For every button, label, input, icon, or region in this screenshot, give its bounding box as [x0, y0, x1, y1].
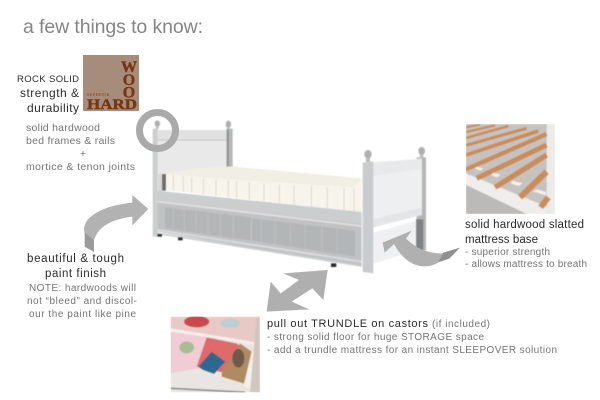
photo: trundle drawer [171, 316, 260, 392]
text: paint finish note: our the paint like pine [29, 309, 136, 320]
icon: hardwood stamp [83, 55, 139, 113]
text: paint finish note [27, 283, 137, 320]
icon: hardwood stamp: W [121, 59, 137, 76]
heading: trundle: (if included) [432, 319, 490, 330]
trundle drawer [157, 202, 362, 267]
icon: hardwood stamp: O [123, 84, 135, 102]
heading: paint finish [27, 253, 124, 280]
heading: rock solid: ROCK SOLID [17, 74, 79, 85]
footboard front post [363, 150, 373, 273]
text: hardwood description [26, 122, 135, 173]
heading: paint finish: beautiful & tough [27, 253, 124, 265]
text: paint finish note: NOTE: hardwoods will [29, 283, 136, 294]
icon: hardwood stamp: HARD [87, 97, 137, 113]
panel: paint finish text [27, 253, 137, 320]
text: slatted base bullets [465, 247, 587, 270]
mattress [166, 167, 362, 212]
heading: slatted base [465, 219, 584, 246]
text: paint finish note: not “bleed” and discol- [27, 296, 137, 307]
icon: hardwood stamp: O [123, 72, 135, 89]
far footboard post [416, 147, 426, 251]
callout ring [140, 112, 176, 148]
trundle end [373, 221, 416, 264]
text: slatted base bullets: - allows mattress to breath [465, 259, 587, 270]
heading: rock solid: durability [27, 101, 79, 115]
arrow: curved to slatted base [383, 231, 460, 266]
text: hardwood description: mortice & tenon joints [26, 161, 135, 173]
headboard [153, 120, 233, 237]
title: a few things to know: [23, 16, 203, 38]
side rail [157, 191, 362, 226]
heading: trundle: pull out TRUNDLE on castors [267, 318, 428, 330]
heading: slatted base: mattress base [465, 234, 538, 246]
icon: hardwood stamp: SUPERIOR [87, 93, 110, 97]
arrow: curved to paint finish [84, 195, 148, 252]
heading: rock solid: strength & [20, 86, 79, 100]
castors [157, 234, 336, 267]
arrow: double-headed trundle [267, 270, 328, 312]
text: trundle bullets [267, 332, 557, 356]
panel: trundle [171, 316, 557, 392]
panel: rock solid strength [17, 55, 139, 173]
text: slatted base bullets: - superior strength [465, 247, 550, 258]
text: trundle bullets: - add a trundle mattress for an instant SLEEPOVER solution [267, 345, 557, 356]
text: hardwood description: bed frames & rails [26, 135, 115, 147]
photo: slats [466, 124, 555, 214]
heading: paint finish: paint finish [45, 268, 106, 280]
panel: slatted base [465, 124, 587, 270]
heading: rock solid [17, 74, 79, 115]
text: hardwood description: + [80, 148, 86, 160]
bed illustration [153, 120, 426, 273]
text: trundle bullets: - strong solid floor for huge STORAGE space [267, 332, 484, 343]
footboard panel [373, 159, 422, 226]
heading: slatted base: solid hardwood slatted [465, 219, 584, 231]
text: hardwood description: solid hardwood [26, 122, 100, 134]
